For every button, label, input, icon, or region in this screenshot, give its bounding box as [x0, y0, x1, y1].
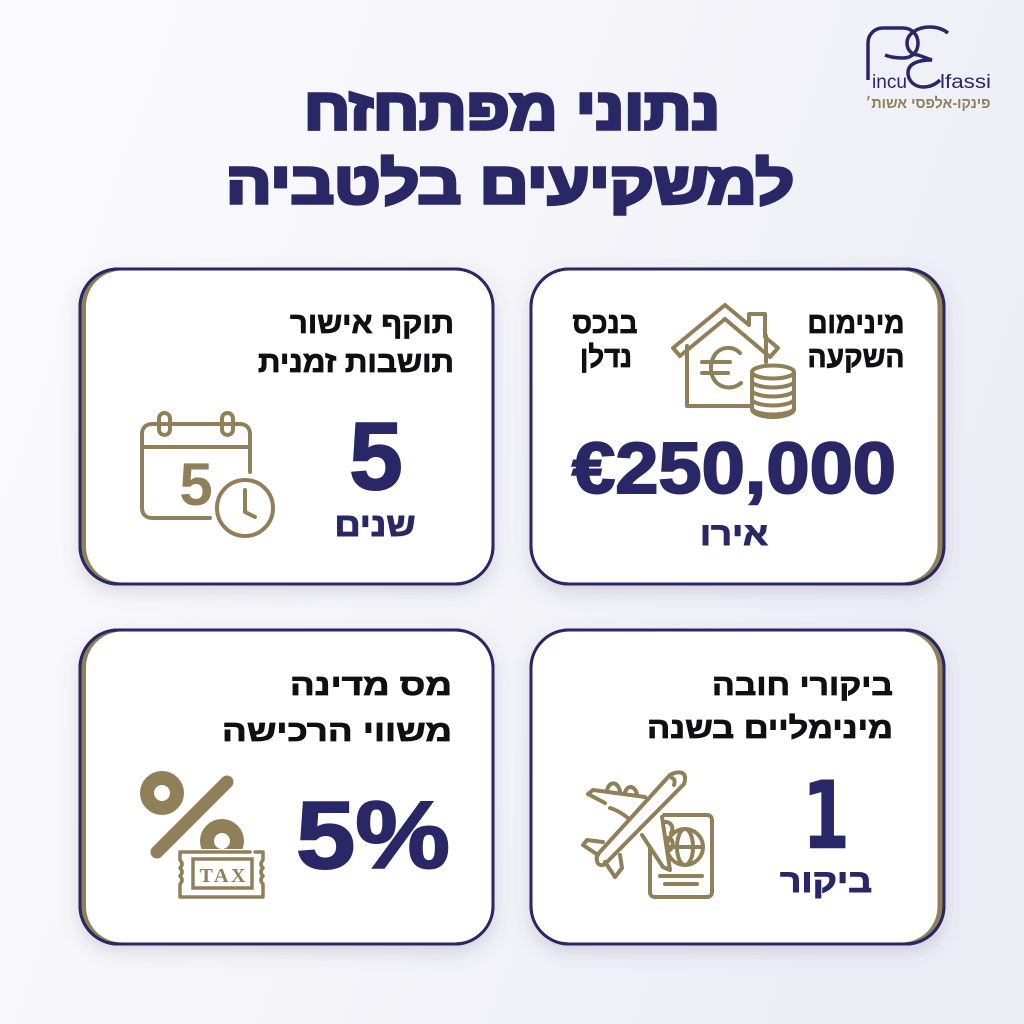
panel: mandatory visits — [531, 630, 944, 944]
label: validity — [258, 307, 454, 379]
label: state tax: משווי הרכישה — [222, 715, 452, 748]
amount: €250,000 — [572, 429, 896, 509]
icon: calendar with clock: 5 — [179, 451, 213, 518]
number: 5 percent: 5% — [296, 782, 450, 889]
icon: calendar with clock — [142, 413, 273, 536]
title: למשקיעים בלטביה — [226, 151, 794, 216]
title: נתוני מפתחזח — [304, 77, 720, 142]
panel: residency validity — [80, 269, 493, 584]
label: visits — [647, 669, 893, 745]
label: visits: מינימליים בשנה — [647, 712, 893, 745]
label: minimum investment — [808, 307, 904, 374]
number: 1: 1 — [802, 762, 850, 871]
label: state tax — [222, 669, 452, 748]
panel: minimum investment — [531, 269, 944, 584]
label: in real estate: בנכס — [572, 307, 638, 340]
logo: incu — [872, 72, 907, 93]
unit: visit: ביקור — [780, 863, 872, 899]
label: in real estate: נדלן — [580, 341, 632, 374]
label: minimum investment: השקעה — [808, 341, 904, 374]
icon: plane and passport — [583, 772, 712, 897]
label: state tax: מס מדינה — [290, 669, 452, 702]
icon: percent and tax ticket: TAX — [200, 865, 246, 887]
label: validity: תושבות זמנית — [258, 346, 454, 379]
icon: percent and tax ticket — [147, 778, 263, 897]
label: in real estate — [572, 307, 638, 374]
number: 5: 5 — [349, 403, 403, 510]
unit: years: שנים — [334, 506, 416, 543]
logo: פינקו-אלפסי אשות׳ — [866, 95, 990, 112]
logo: lfassi — [940, 72, 991, 93]
logo — [866, 27, 991, 112]
label: minimum investment: מינימום — [808, 307, 904, 340]
panel: state tax — [80, 630, 493, 944]
icon: house with euro and coins — [673, 305, 794, 417]
label: validity: תוקף אישור — [290, 307, 454, 340]
title — [226, 77, 794, 216]
label: visits: ביקורי חובה — [712, 669, 893, 702]
unit: euro: אירו — [700, 516, 768, 552]
